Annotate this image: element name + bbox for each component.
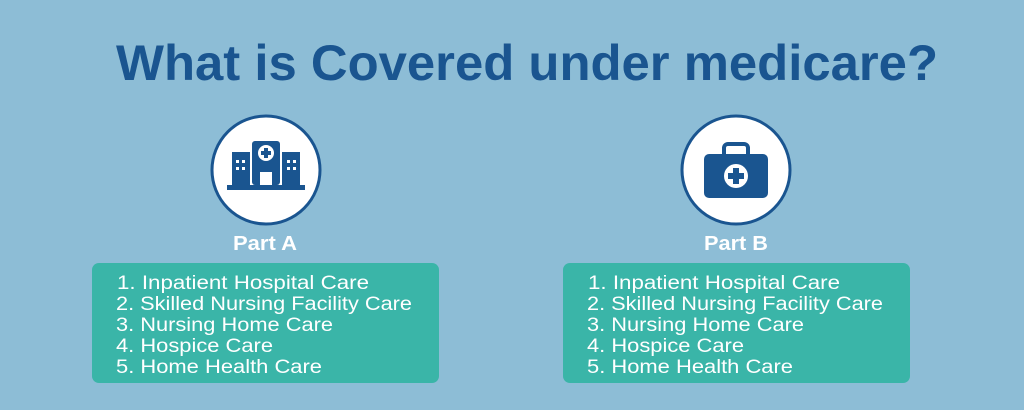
list box A: 1. Inpatient Hospital Care	[117, 273, 369, 294]
list box A	[92, 263, 439, 383]
list box A: 4. Hospice Care	[116, 336, 273, 357]
list box A: 5. Home Health Care	[116, 357, 322, 378]
list box B: 2. Skilled Nursing Facility Care	[587, 294, 883, 315]
list box B: 5. Home Health Care	[587, 357, 793, 378]
list box B: 3. Nursing Home Care	[587, 315, 804, 336]
list box A: 2. Skilled Nursing Facility Care	[116, 294, 412, 315]
heading: Part B: Part B	[704, 233, 768, 255]
list box A: 3. Nursing Home Care	[116, 315, 333, 336]
title: What is Covered under medicare?	[116, 35, 938, 91]
heading: Part A: Part A	[233, 233, 297, 255]
icon: hospital	[212, 116, 320, 224]
panel: Part A	[92, 116, 439, 383]
panel: Part B	[563, 116, 910, 383]
icon: medical bag	[682, 116, 790, 224]
list box B: 1. Inpatient Hospital Care	[588, 273, 840, 294]
list box B: 4. Hospice Care	[587, 336, 744, 357]
list box B	[563, 263, 910, 383]
